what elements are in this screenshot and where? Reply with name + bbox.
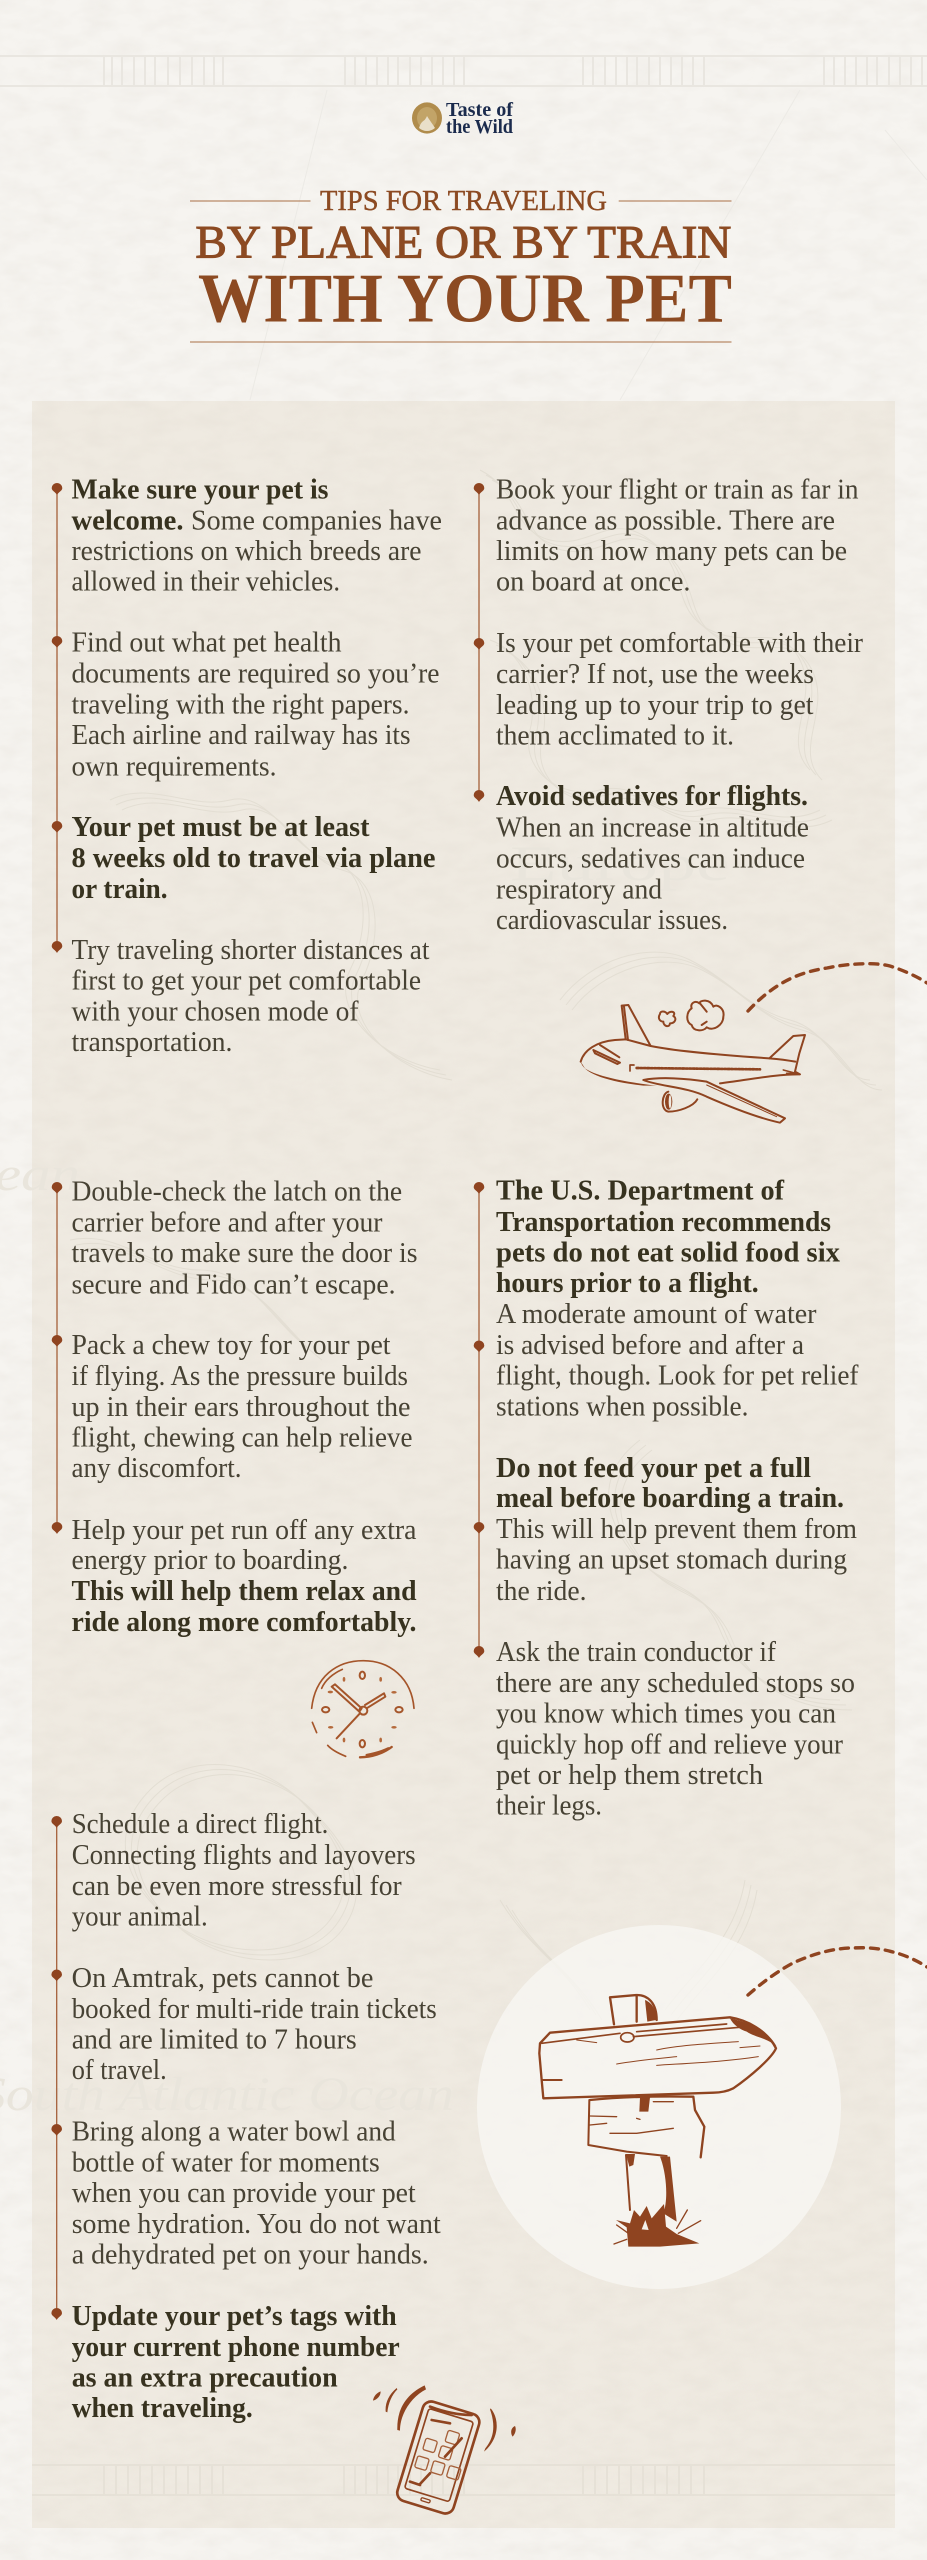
icon: wooden signpost [539,1995,777,2247]
tips section 2, left column: Pack a chew toy for your pet [72,1330,391,1361]
tips section 1, right column [474,474,864,936]
title block [190,186,732,342]
tips section 3: when you can provide your pet [72,2178,416,2209]
tips section 1, left column: restrictions on which breeds are [72,536,422,567]
tips section 3: Bring along a water bowl and [72,2116,396,2147]
tips section 3: some hydration. You do not want [72,2209,441,2240]
tips section 2, right column: Transportation recommends [496,1207,831,1238]
tips section 1, right column: respiratory and [496,874,662,905]
tips section 3: as an extra precaution [72,2362,338,2394]
tips section 2, right column: is advised before and after a [496,1330,805,1361]
dashed path: signpost [748,1948,927,1995]
tips section 2, right column: pets do not eat solid food six [496,1238,840,1269]
tips section 2, left column: energy prior to boarding. [72,1545,348,1576]
tips section 3: booked for multi-ride train tickets [72,1994,437,2025]
tips section 2, right column: stations when possible. [496,1392,748,1423]
tips section 3: can be even more stressful for [72,1871,402,1902]
tips section 2, right column: flight, though. Look for pet relief [496,1360,859,1391]
tips section 1, left column: Make sure your pet is [72,474,329,505]
tips section 1, right column: Avoid sedatives for flights. [496,781,808,812]
tips section 3: when traveling. [72,2393,253,2424]
logo: Taste of [446,99,513,121]
tips section 1, left column [52,474,442,1058]
icon: clock [312,1661,414,1757]
tips section 1, right column: When an increase in altitude [496,812,809,843]
tips section 3 [51,1809,441,2424]
tips section 2, left column: any discomfort. [72,1453,242,1484]
tips section 1, right column: advance as possible. There are [496,506,835,537]
tips section 1, left column: transportation. [72,1027,232,1058]
tips section 3: a dehydrated pet on your hands. [72,2240,429,2271]
tips section 1, right column: them acclimated to it. [496,720,734,752]
tips section 1, left column: Each airline and railway has its [72,720,410,751]
tips section 3: your animal. [72,1902,208,1933]
tips section 1, right column: carrier? If not, use the weeks [496,659,814,690]
tips section 3: Connecting flights and layovers [72,1840,416,1871]
tips section 1, left column: or train. [72,874,168,905]
tips section 2, left column: up in their ears throughout the [72,1392,410,1423]
tips section 2, left column: flight, chewing can help relieve [72,1422,412,1453]
tips section 2, right column: meal before boarding a train. [496,1483,844,1514]
tips section 3: On Amtrak, pets cannot be [72,1963,373,1994]
tips section 2, left column [52,1176,417,1638]
tips section 2, left column: Help your pet run off any extra [72,1515,417,1546]
tips section 2, left column: Double-check the latch on the [72,1176,402,1207]
tips section 1, right column: limits on how many pets can be [496,536,847,567]
tips section 2, right column: Do not feed your pet a full [496,1453,811,1484]
tips section 2, left column: secure and Fido can’t escape. [72,1269,396,1300]
tips section 2, right column: A moderate amount of water [496,1299,817,1330]
icon: vibrating phone [373,2385,516,2516]
tips section 1, left column: Some companies have [191,506,442,537]
tips section 3: Schedule a direct flight. [72,1809,328,1840]
tips section 3: your current phone number [72,2332,400,2363]
tips section 3: of travel. [72,2055,167,2086]
tips section 2, right column [474,1176,859,1822]
tips section 1, left column: Your pet must be at least [72,812,370,843]
content panel background: Europe [510,835,730,891]
tips section 2, right column: there are any scheduled stops so [496,1668,855,1699]
tips section 2, left column: if flying. As the pressure builds [72,1361,408,1392]
tips section 2, left column: ride along more comfortably. [72,1607,416,1638]
logo [412,99,513,138]
tips section 3: and are limited to 7 hours [72,2024,357,2056]
tips section 2, left column: carrier before and after your [72,1208,383,1239]
white circle behind signpost [477,1925,841,2289]
tips section 2, right column: Ask the train conductor if [496,1637,777,1668]
tips section 1, left column: Find out what pet health [72,627,342,658]
tips section 2, right column: The U.S. Department of [496,1176,785,1206]
tips section 2, right column: quickly hop off and relieve your [496,1730,844,1760]
tips section 1, right column: leading up to your trip to get [496,690,814,721]
title block: TIPS FOR TRAVELING [320,186,607,217]
tips section 1, left column: traveling with the right papers. [72,689,410,720]
title block: BY PLANE OR BY TRAIN [195,217,731,269]
title block: WITH YOUR PET [198,261,732,338]
tips section 2, right column: This will help prevent them from [496,1514,857,1545]
tips section 1, right column: cardiovascular issues. [496,905,728,936]
tips section 1, right column: Book your flight or train as far in [496,474,858,505]
tips section 1, left column: documents are required so you’re [72,659,440,690]
tips section 2, right column: hours prior to a flight. [496,1268,759,1299]
tips section 1, left column: Try traveling shorter distances at [72,935,430,966]
tips section 1, left column: own requirements. [72,751,276,782]
tips section 2, right column: their legs. [496,1791,602,1822]
tips section 1, left column: 8 weeks old to travel via plane [72,843,436,874]
tips section 2, left column: travels to make sure the door is [72,1238,418,1269]
tips section 2, right column: you know which times you can [496,1699,836,1730]
tips section 1, left column: first to get your pet comfortable [72,966,421,997]
tips section 3: bottle of water for moments [72,2147,380,2178]
logo: the Wild [446,116,513,138]
tips section 1, right column: Is your pet comfortable with their [496,628,864,659]
tips section 1, left column: allowed in their vehicles. [72,567,340,598]
icon: airplane [581,1001,805,1123]
tips section 2, right column: the ride. [496,1576,586,1607]
tips section 2, right column: pet or help them stretch [496,1760,763,1791]
tips section 2, right column: having an upset stomach during [496,1545,847,1576]
tips section 1, right column: on board at once. [496,567,690,598]
tips section 2, left column: This will help them relax and [72,1576,417,1607]
tips section 1, right column: occurs, sedatives can induce [496,844,805,875]
tips section 3: Update your pet’s tags with [72,2301,397,2332]
tips section 1, left column: with your chosen mode of [72,996,359,1028]
tips section 1, left column: welcome. [72,506,184,537]
dashed flight path: plane [748,964,927,1011]
